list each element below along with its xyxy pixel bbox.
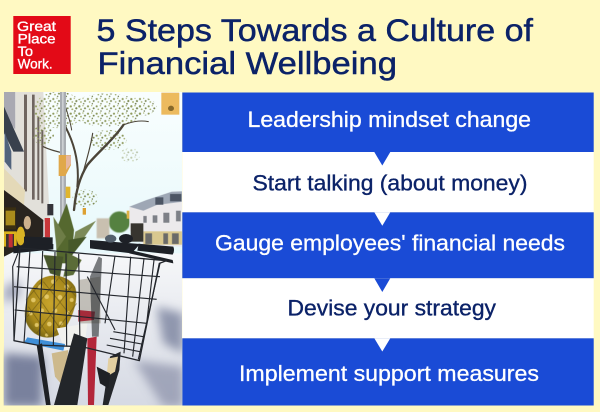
step 1 band: Leadership mindset change — [182, 92, 594, 152]
step 5 band: Implement support measures — [182, 338, 594, 406]
step 5 band: Implement support measures: Implement support measures — [239, 361, 539, 386]
photo: pineapple in a bicycle basket on a city street — [4, 92, 183, 407]
step 4 band: Devise your strategy — [182, 278, 594, 338]
wire basket — [13, 248, 167, 361]
sky — [10, 92, 182, 254]
signal pole and traffic signs — [59, 92, 179, 232]
step 1 band: Leadership mindset change: Leadership mindset change — [248, 107, 531, 132]
step 3 band: Gauge employees' financial needs: Gauge employees' financial needs — [215, 230, 565, 256]
logo: Great Place To Work: Great — [17, 18, 56, 34]
building: left storefronts — [4, 92, 53, 257]
step 4 band: Devise your strategy: Devise your strategy — [288, 296, 497, 320]
title — [96, 12, 533, 81]
logo: Great Place To Work: To — [18, 43, 33, 59]
step 3 band: Gauge employees' financial needs — [182, 212, 594, 278]
title: Financial Wellbeing — [98, 45, 397, 81]
road and pavement — [4, 253, 182, 407]
pineapple crown — [43, 203, 96, 277]
tree — [33, 92, 157, 210]
paper under pineapple — [57, 323, 87, 352]
step 2 band: Start talking (about money) — [182, 152, 594, 212]
logo: Great Place To Work: Place — [18, 31, 56, 47]
logo: Great Place To Work: Work. — [18, 56, 53, 72]
building: right white corner — [129, 191, 182, 247]
handlebars — [13, 234, 174, 263]
title: 5 Steps Towards a Culture of — [96, 12, 533, 48]
bicycle frame and wheel — [37, 257, 121, 405]
step 2 band: Start talking (about money): Start talking (about money) — [252, 170, 528, 196]
logo: Great Place To Work — [13, 16, 71, 74]
pineapple body — [25, 276, 77, 338]
distant green tree — [109, 211, 130, 233]
